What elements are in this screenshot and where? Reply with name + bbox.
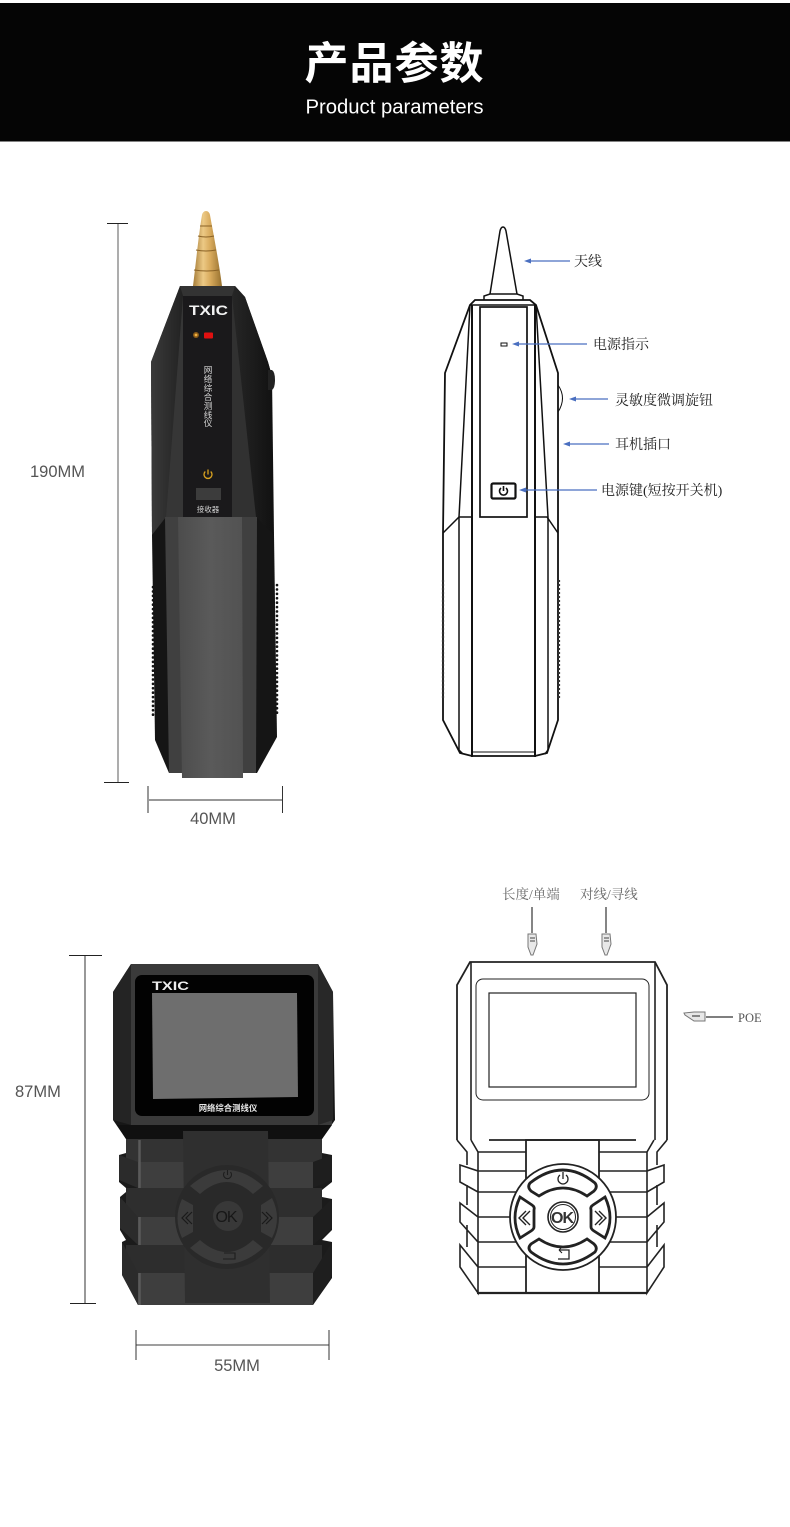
control dial	[175, 1165, 279, 1269]
vertical product name: 网	[204, 365, 212, 375]
key glyphs	[519, 1211, 606, 1225]
antenna	[193, 211, 222, 286]
vertical product name: 仪	[204, 418, 213, 428]
pointer: length port	[528, 907, 537, 955]
left rubber bands	[457, 1140, 526, 1293]
vertical product name: 线	[204, 409, 213, 420]
control dial: OK	[215, 1209, 238, 1226]
down key	[529, 1239, 596, 1264]
diagram: main tester line drawing	[457, 962, 667, 1293]
collar	[484, 294, 523, 300]
up key	[529, 1170, 596, 1196]
outer shell	[443, 300, 558, 756]
subtitle: Product parameters	[305, 96, 484, 118]
upper shell	[113, 964, 335, 1139]
callout: sensitivity knob	[569, 392, 713, 409]
screen	[152, 993, 298, 1099]
brand logo: TXIC	[152, 979, 189, 993]
control panel	[183, 296, 232, 517]
callout: antenna	[524, 253, 602, 270]
receiver label: 接收器	[197, 504, 220, 514]
center strip	[526, 1140, 599, 1293]
callouts: tester ports	[502, 886, 762, 1025]
callout: power indicator: 电源指示	[593, 336, 650, 353]
right key	[591, 1197, 610, 1238]
header banner	[0, 3, 790, 142]
vertical product name: 测	[204, 401, 212, 411]
control dial: OK	[551, 1210, 574, 1227]
diagram: pen line drawing	[443, 227, 562, 757]
dimension: width 40MM	[148, 786, 282, 828]
vertical product name: 络	[204, 373, 213, 384]
dimension: height 87MM	[15, 956, 102, 1304]
callouts: pen parts	[512, 253, 723, 499]
led marker	[501, 343, 507, 346]
up key	[190, 1170, 263, 1194]
title: 产品参数	[304, 40, 484, 88]
dimension: width 40MM: 40MM	[190, 810, 236, 828]
screen bezel	[135, 975, 314, 1116]
vertical product name: 合	[204, 391, 213, 402]
power icon	[204, 470, 212, 478]
down key	[190, 1240, 263, 1264]
screen	[489, 993, 636, 1087]
pen lower shell	[152, 517, 277, 778]
dimension: width 55MM	[136, 1330, 329, 1375]
right key	[261, 1198, 277, 1238]
callout: antenna: 天线	[574, 253, 602, 270]
lower rubber bands	[119, 1125, 332, 1305]
dimension: height 190MM	[30, 224, 129, 782]
control dial	[510, 1164, 616, 1270]
ok key	[548, 1202, 578, 1232]
screen bezel	[476, 979, 649, 1100]
grip dots	[443, 580, 559, 700]
label: pair / tracing: 对线/寻线	[580, 886, 638, 902]
callout: power key: 电源键(短按开关机)	[601, 482, 723, 499]
callout: power key	[519, 482, 723, 499]
pointer: pair port	[602, 907, 611, 955]
pen upper shell	[151, 286, 272, 535]
vertical product name: 综	[204, 382, 213, 393]
pointer: POE port	[684, 1012, 733, 1021]
label: length / single end: 长度/单端	[502, 886, 560, 902]
brand logo: TXIC	[189, 303, 228, 318]
left key	[515, 1197, 534, 1238]
device: main tester front photo	[113, 964, 335, 1305]
inner panel	[480, 307, 527, 517]
callout: headphone jack: 耳机插口	[615, 436, 671, 453]
left key	[178, 1199, 193, 1238]
indicator LEDs	[193, 332, 213, 338]
device: tester receiver pen front photo	[151, 211, 277, 778]
top shell outline	[457, 962, 667, 1140]
callout: headphone jack	[563, 436, 671, 453]
center strip	[183, 1131, 270, 1303]
label: POE: POE	[738, 1011, 762, 1025]
product name: 网络综合测线仪	[199, 1103, 258, 1113]
callout: sensitivity knob: 灵敏度微调旋钮	[615, 392, 713, 409]
dimension: height 190MM: 190MM	[30, 463, 85, 481]
key glyphs	[182, 1212, 272, 1224]
ok key	[213, 1201, 243, 1231]
dimension: height 87MM: 87MM	[15, 1083, 61, 1101]
antenna outline	[490, 227, 517, 294]
dimension: width 55MM: 55MM	[214, 1357, 260, 1375]
side knob	[268, 370, 275, 390]
knob outline	[558, 385, 562, 412]
power key	[492, 484, 516, 498]
power button	[196, 488, 221, 500]
callout: power indicator	[512, 336, 650, 353]
right rubber bands	[599, 1140, 667, 1293]
